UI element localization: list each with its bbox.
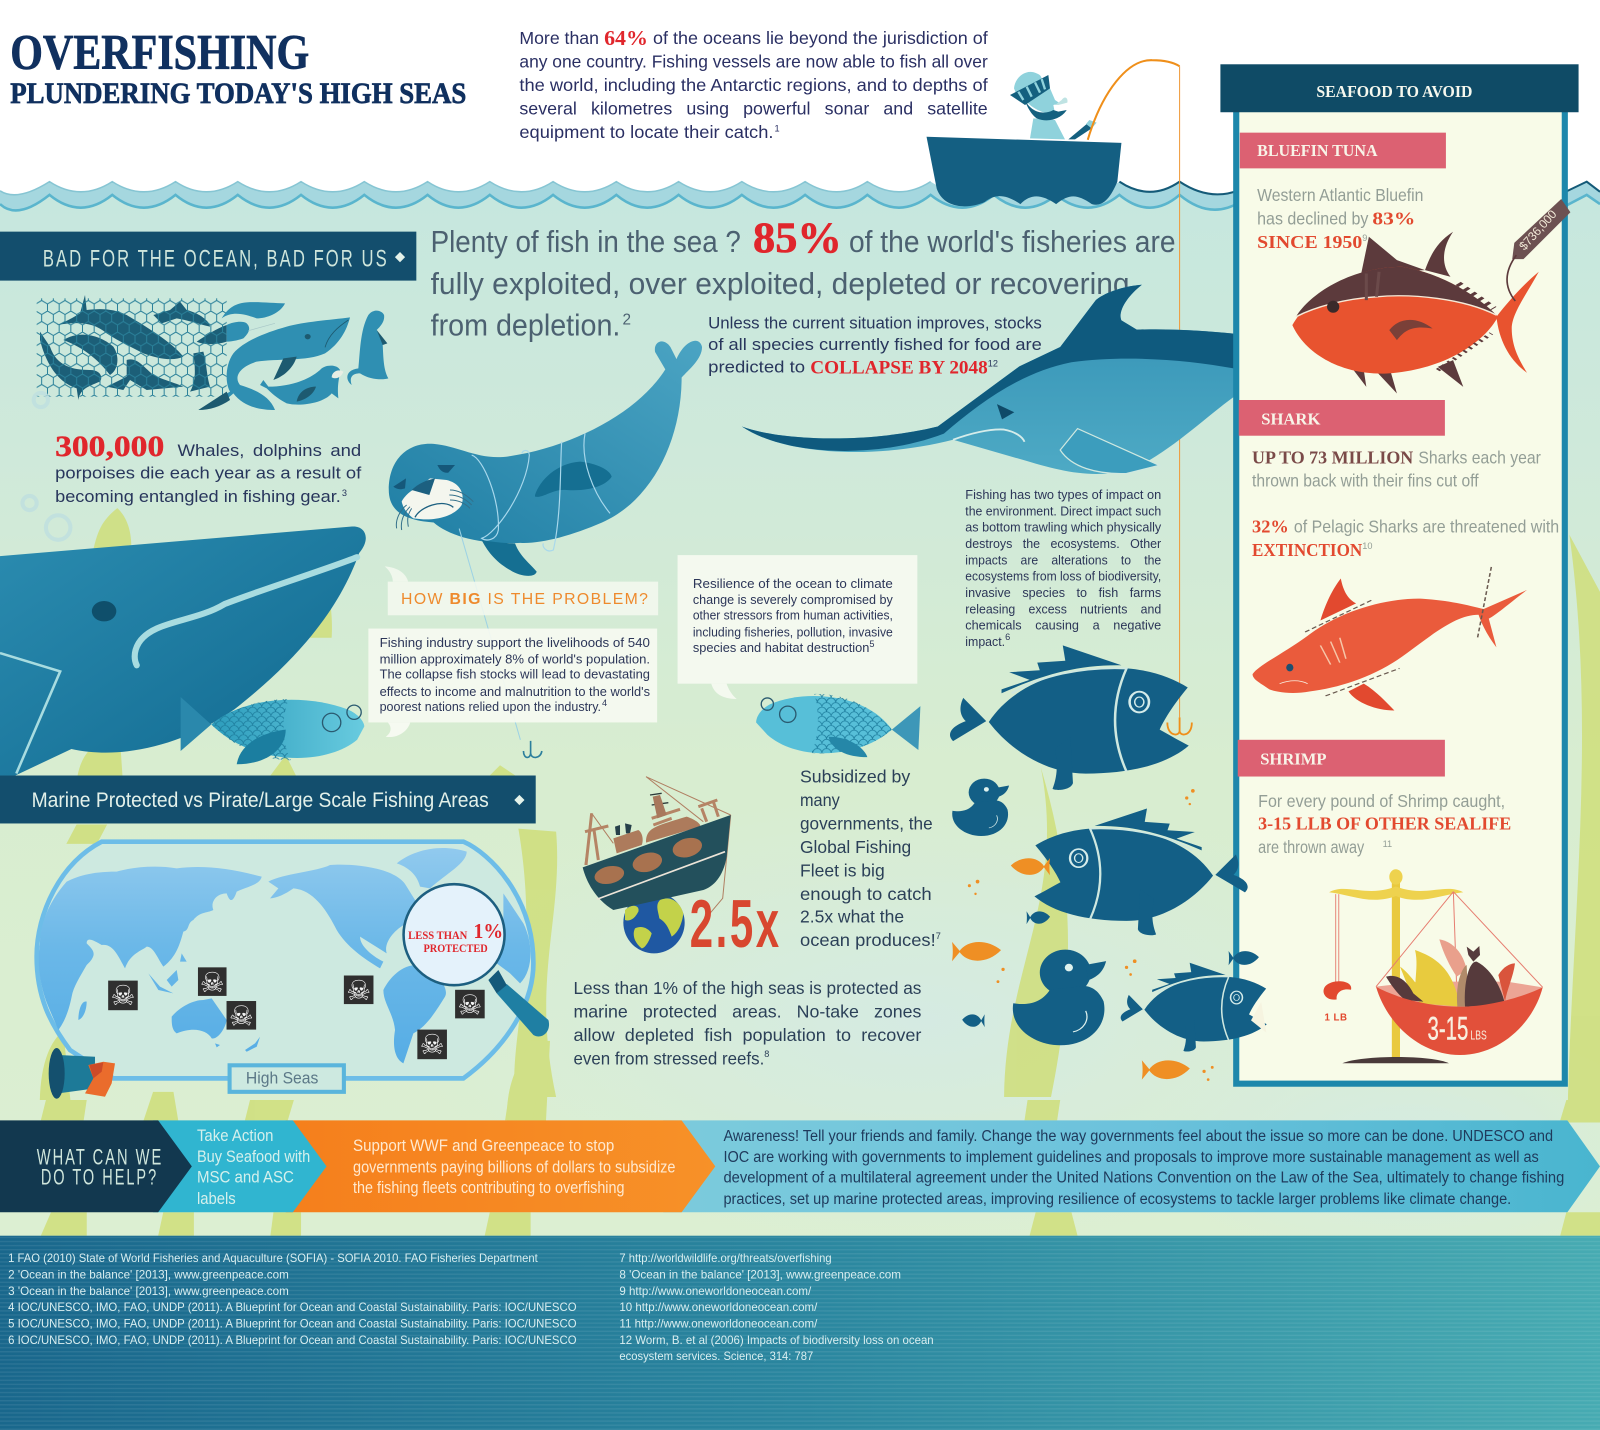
big seal xyxy=(389,341,702,740)
less than 1% text: even from stressed reefs. xyxy=(573,1048,764,1068)
resilience box: change is severely compromised by xyxy=(693,592,893,607)
high seas label: High Seas xyxy=(246,1070,318,1088)
shrimp section: 11 xyxy=(1383,839,1392,849)
headline: 85% xyxy=(753,215,842,262)
subsidized text: ocean produces! xyxy=(800,930,936,950)
fishing impact text: invasive species to fish farms xyxy=(965,585,1161,600)
300,000 stat xyxy=(55,431,362,506)
intro text xyxy=(519,26,988,142)
duck one xyxy=(952,779,1009,836)
shark section: 32% xyxy=(1252,517,1289,537)
high seas label xyxy=(230,1065,344,1092)
greenpeace arrow: the fishing fleets contributing to overfishing xyxy=(353,1179,624,1197)
300,000 stat: porpoises die each year as a result of xyxy=(55,464,362,483)
pirate flags: ☠ xyxy=(458,989,482,1021)
how big text box: million approximately 8% of world's population. xyxy=(380,651,650,666)
pirate flags: ☠ xyxy=(229,1001,254,1033)
fish three mouth contents xyxy=(1251,1002,1266,1033)
bluefin tuna section: Western Atlantic Bluefin xyxy=(1257,185,1423,205)
glasses fish left xyxy=(181,697,364,764)
fishing impact text: impacts are alterations to the xyxy=(965,552,1161,567)
take action arrow: MSC and ASC xyxy=(197,1169,294,1187)
title xyxy=(10,23,466,110)
fisherman xyxy=(1010,72,1097,139)
references left: 2 'Ocean in the balance' [2013], www.greenpeace.com xyxy=(8,1268,289,1282)
resilience box: Resilience of the ocean to climate xyxy=(693,576,893,591)
magnifier: 1% xyxy=(473,919,503,943)
factory ship and globe xyxy=(583,777,731,953)
heading arrow: WHAT CAN WE xyxy=(37,1144,163,1169)
price tag: $736,000 xyxy=(1516,207,1560,253)
intro text: 1 xyxy=(774,124,780,134)
hook xyxy=(523,741,542,757)
title: OVERFISHING xyxy=(10,23,309,79)
how big text box: effects to income and malnutrition to the world's xyxy=(380,684,650,699)
fishing impact text: as bottom trawling which physically xyxy=(965,520,1162,535)
less than 1% text: allow depleted fish population to recover xyxy=(573,1025,921,1045)
shrimp section: For every pound of Shrimp caught, xyxy=(1258,791,1505,811)
ship xyxy=(583,777,731,913)
references right xyxy=(619,1251,934,1363)
shrimp section: 3-15 LLB OF OTHER SEALIFE xyxy=(1258,814,1511,834)
fishing impact text: impact. xyxy=(965,634,1005,649)
subsidized text: many xyxy=(800,790,840,810)
greenpeace arrow: governments paying billions of dollars to subsidize xyxy=(353,1158,676,1176)
intro text: several kilometres using powerful sonar and satellite xyxy=(519,98,988,118)
globe xyxy=(623,892,685,953)
subsidized text: 7 xyxy=(936,931,941,941)
pirate flags: ☠ xyxy=(200,967,225,999)
bluefin tuna section: 9 xyxy=(1362,233,1367,243)
headline: fully exploited, over exploited, depleted or recovering xyxy=(431,267,1130,301)
price tag xyxy=(1507,199,1570,301)
small orange fish xyxy=(952,789,1214,1081)
title: PLUNDERING TODAY'S HIGH SEAS xyxy=(10,78,466,110)
bluefin tuna section: BLUEFIN TUNA xyxy=(1257,141,1378,160)
greenpeace arrow: Support WWF and Greenpeace to stop xyxy=(353,1137,614,1155)
headline xyxy=(431,215,1176,343)
panel header xyxy=(1220,64,1579,112)
subsidized text: governments, the xyxy=(800,814,933,834)
how big text box xyxy=(368,629,657,737)
large fish two xyxy=(1034,808,1248,935)
shark xyxy=(1253,567,1527,710)
references left: 6 IOC/UNESCO, IMO, FAO, UNDP (2011). A Blueprint for Ocean and Coastal Sustainability. Paris: IOC/UNESCO xyxy=(8,1333,577,1347)
tuna xyxy=(1292,232,1539,393)
fishing impact text: 6 xyxy=(1005,632,1010,642)
big fish hook xyxy=(1167,717,1192,734)
subsidized text: 2.5x what the xyxy=(800,906,904,926)
bluefin tuna section: has declined by xyxy=(1257,208,1369,228)
unless text: Unless the current situation improves, stocks xyxy=(708,314,1042,333)
awareness arrow: IOC are working with governments to implement guidelines and proposals to improve more sustainable management as well as xyxy=(723,1149,1539,1166)
awareness arrow: Awareness! Tell your friends and family. Change the way governments feel about the issue so more can be done. UNDESCO and xyxy=(723,1128,1553,1145)
how big is the problem heading: HOW BIG IS THE PROBLEM? xyxy=(401,591,648,608)
shark section: EXTINCTION xyxy=(1252,540,1363,560)
fishing impact text: destroys the ecosystems. Other xyxy=(965,536,1162,551)
resilience box: species and habitat destruction xyxy=(693,640,869,655)
300,000 stat: Whales, dolphins and xyxy=(178,441,361,460)
how big text box: The collapse fish stocks will lead to devastating xyxy=(380,667,650,682)
heading arrow xyxy=(0,1120,192,1212)
greenpeace arrow xyxy=(286,1120,715,1212)
subsidized text: Global Fishing xyxy=(800,837,911,857)
banner: bad for the ocean xyxy=(0,232,416,281)
fishing impact text: the environment. Direct impact such xyxy=(965,503,1161,518)
unless text: COLLAPSE BY 2048 xyxy=(810,357,988,378)
resilience box: including fisheries, pollution, invasive xyxy=(693,625,893,640)
unless text: predicted to xyxy=(708,357,805,376)
fishing impact text: ecosystems from loss of biodiversity, xyxy=(965,569,1161,584)
references right: 12 Worm, B. et al (2006) Impacts of biodiversity loss on ocean xyxy=(619,1333,934,1347)
subsidized text xyxy=(800,767,941,950)
references right: ecosystem services. Science, 314: 787 xyxy=(619,1349,813,1363)
pirate flags: ☠ xyxy=(346,975,371,1007)
unless text: 12 xyxy=(988,358,998,368)
headline: from depletion. xyxy=(431,309,620,343)
magnifier: LESS THAN xyxy=(408,930,467,942)
references left xyxy=(8,1251,577,1347)
pirate flags: ☠ xyxy=(111,980,135,1012)
unless text xyxy=(708,314,1042,378)
intro text: the world, including the Antarctic regions, and to depths of xyxy=(519,75,988,95)
less than 1% text: marine protected areas. No-take zones xyxy=(573,1001,921,1021)
2.5x stat: 2.5x xyxy=(690,887,782,962)
fishing impact text: chemicals causing a negative xyxy=(965,618,1161,633)
references left: 1 FAO (2010) State of World Fisheries and Aquaculture (SOFIA) - SOFIA 2010. FAO Fisheries Department xyxy=(8,1251,538,1265)
large fish one xyxy=(950,645,1189,790)
shark section: SHARK xyxy=(1261,409,1321,428)
resilience box xyxy=(678,555,917,699)
bubbles xyxy=(22,393,70,540)
fishing impact text xyxy=(965,487,1162,649)
fishing rod and line xyxy=(1088,60,1180,717)
references left: 3 'Ocean in the balance' [2013], www.greenpeace.com xyxy=(8,1284,289,1298)
shrimp section xyxy=(1238,740,1543,1063)
less than 1% text xyxy=(573,978,921,1068)
unless text: of all species currently fished for food are xyxy=(708,335,1042,354)
less than 1% text: 8 xyxy=(764,1049,769,1059)
fishing impact text: releasing excess nutrients and xyxy=(965,601,1161,616)
awareness arrow xyxy=(663,1120,1600,1212)
intro text: 64% xyxy=(604,26,648,50)
take action arrow: Buy Seafood with xyxy=(197,1148,310,1166)
resilience box: other stressors from human activities, xyxy=(693,607,893,622)
fisherman with boat xyxy=(927,60,1180,717)
intro text: More than xyxy=(519,28,599,48)
bucket and crab xyxy=(49,1048,115,1099)
300,000 stat: 3 xyxy=(342,488,347,498)
resilience box: 5 xyxy=(869,639,874,649)
duck two xyxy=(1013,950,1106,1045)
large fish three xyxy=(1121,963,1277,1052)
big whale xyxy=(0,526,366,776)
swordfish xyxy=(742,285,1234,474)
what can we do banner xyxy=(0,1120,1600,1212)
footer references xyxy=(0,1236,1600,1430)
awareness arrow: practices, set up marine protected areas, improving resilience of ecosystems to tackle larger problems like climate change. xyxy=(723,1191,1511,1208)
references right: 10 http://www.oneworldoneocean.com/ xyxy=(619,1300,818,1314)
references right: 8 'Ocean in the balance' [2013], www.greenpeace.com xyxy=(619,1268,901,1282)
awareness arrow: development of a multilateral agreement under the United Nations Convention on the Law of the Sea, ultimately to change fishing xyxy=(723,1170,1564,1187)
banner: marine protected: Marine Protected vs Pirate/Large Scale Fishing Areas xyxy=(32,788,489,812)
shark section: thrown back with their fins cut off xyxy=(1252,471,1479,491)
how big text box: poorest nations relied upon the industry. xyxy=(380,699,601,714)
bluefin tuna section: 83% xyxy=(1372,208,1415,228)
magnifier: PROTECTED xyxy=(423,943,488,955)
pirate flags: ☠ xyxy=(420,1029,444,1061)
headline: of the world's fisheries are xyxy=(849,225,1176,259)
intro text: any one country. Fishing vessels are now able to fish all over xyxy=(519,51,988,71)
references right: 11 http://www.oneworldoneocean.com/ xyxy=(619,1317,818,1331)
how big text box: 4 xyxy=(602,698,607,708)
take action arrow: labels xyxy=(197,1190,236,1208)
references left: 5 IOC/UNESCO, IMO, FAO, UNDP (2011). A Blueprint for Ocean and Coastal Sustainability. Paris: IOC/UNESCO xyxy=(8,1317,577,1331)
fish school xyxy=(950,645,1277,1081)
bluefin tuna section xyxy=(1240,133,1570,393)
scale with bycatch: 3-15 xyxy=(1428,1009,1468,1046)
heading arrow: DO TO HELP? xyxy=(41,1165,158,1190)
whales, seal and otter xyxy=(198,302,388,410)
continents xyxy=(39,848,531,1063)
net xyxy=(37,295,227,400)
intro text: equipment to locate their catch. xyxy=(519,122,773,142)
references right: 9 http://www.oneworldoneocean.com/ xyxy=(619,1284,812,1298)
shrimp section: SHRIMP xyxy=(1260,749,1327,768)
headline: 2 xyxy=(622,311,631,328)
scale with bycatch: 1 LB xyxy=(1324,1012,1347,1023)
scale with bycatch: LBS xyxy=(1470,1027,1487,1042)
headline: Plenty of fish in the sea ? xyxy=(431,225,741,259)
scale with bycatch xyxy=(1324,869,1543,1063)
small dark fish xyxy=(962,911,1259,1027)
subsidized text: Fleet is big xyxy=(800,861,885,881)
subsidized text: Subsidized by xyxy=(800,767,910,787)
shark section: Sharks each year xyxy=(1418,447,1541,467)
subsidized text: enough to catch xyxy=(800,884,932,904)
intro text: of the oceans lie beyond the jurisdiction of xyxy=(653,28,988,48)
boat hull xyxy=(927,137,1121,206)
fishing impact text: Fishing has two types of impact on xyxy=(965,487,1161,502)
shark section: UP TO 73 MILLION xyxy=(1252,447,1414,467)
300,000 stat: becoming entangled in fishing gear. xyxy=(55,487,341,506)
300,000 stat: 300,000 xyxy=(55,431,164,463)
shark section xyxy=(1239,400,1559,710)
references left: 4 IOC/UNESCO, IMO, FAO, UNDP (2011). A Blueprint for Ocean and Coastal Sustainability. Paris: IOC/UNESCO xyxy=(8,1300,577,1314)
how big is the problem heading xyxy=(385,566,658,615)
references right: 7 http://worldwildlife.org/threats/overfishing xyxy=(619,1251,832,1265)
world map xyxy=(37,842,549,1099)
panel: seafood to avoid xyxy=(1220,64,1579,1084)
take action arrow: Take Action xyxy=(197,1127,273,1145)
banner: bad for the ocean: BAD FOR THE OCEAN, BAD FOR US xyxy=(43,245,389,272)
how big text box: Fishing industry support the livelihoods of 540 xyxy=(380,635,650,650)
panel header: SEAFOOD TO AVOID xyxy=(1316,82,1472,101)
banner: marine protected xyxy=(0,776,536,823)
bluefin tuna section: SINCE 1950 xyxy=(1257,232,1362,252)
seaweed xyxy=(40,508,1600,1236)
pirate flags xyxy=(108,967,485,1061)
shrimp section: are thrown away xyxy=(1258,837,1365,857)
glasses fish right xyxy=(756,694,920,757)
take action arrow xyxy=(153,1120,327,1212)
marine animals in net xyxy=(37,295,388,410)
shark section: of Pelagic Sharks are threatened with xyxy=(1294,517,1559,537)
magnifier xyxy=(404,884,549,1037)
less than 1% text: Less than 1% of the high seas is protected as xyxy=(573,978,921,998)
shark section: 10 xyxy=(1362,541,1372,551)
